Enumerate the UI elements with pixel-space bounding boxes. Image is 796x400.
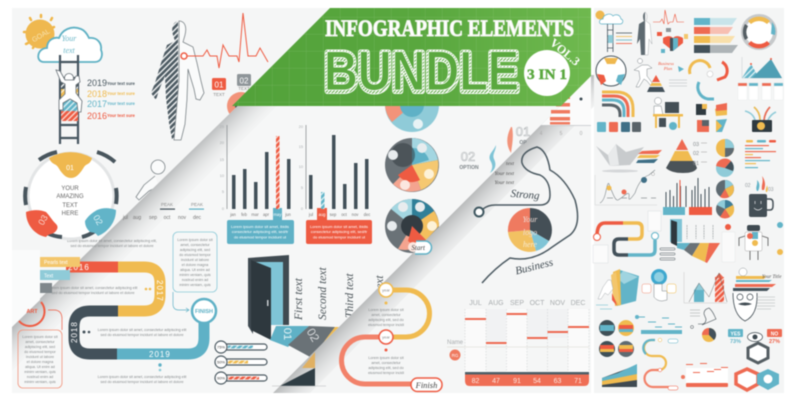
icon: ring node <box>474 208 484 216</box>
axis labels: 5 <box>301 186 303 190</box>
peak labels <box>161 192 203 204</box>
thumb: yes no: NO <box>771 332 778 338</box>
thumb: paper boat <box>596 144 662 172</box>
axis labels: 10 <box>220 174 224 178</box>
icon: heart marker <box>181 53 187 59</box>
axis labels: 0 <box>222 207 224 211</box>
timeline: band years <box>68 263 171 359</box>
ribbon 02: 02 <box>304 326 323 345</box>
callout: teal outlined box: do eiusmod tempor <box>179 253 212 257</box>
title: infographic elements: INFOGRAPHIC ELEMENTS <box>325 16 574 41</box>
thumb: tv <box>745 107 776 132</box>
icon: walking person <box>136 160 165 200</box>
axis labels <box>220 125 224 211</box>
callout: teal outlined box: amet, consectetur <box>180 243 210 247</box>
pie chart: logo: logo <box>523 228 537 237</box>
callout: teal outlined box: aliqua. Ut enim ad <box>180 268 210 272</box>
progress bar: red: 90% <box>217 376 225 380</box>
callout: red outlined box: et dolore magna <box>27 360 54 364</box>
icon: open door with ribbons <box>248 255 339 358</box>
center text: HERE <box>62 211 78 217</box>
thumb: horizontal bars <box>745 140 776 168</box>
icon: sun: GOAL <box>31 28 52 44</box>
icon: start circle <box>19 302 45 326</box>
thumbnails: row six <box>593 211 783 263</box>
thumb: door <box>670 219 720 263</box>
thumb: ring <box>743 16 775 48</box>
bar chart: jul to dec: sep <box>330 212 337 217</box>
icon: cloud: Your <box>62 34 77 43</box>
badge: 01: TEXT <box>213 92 225 97</box>
options: OP <box>519 140 527 146</box>
marker: yellow year <box>379 283 393 304</box>
thumb: pills <box>658 338 678 390</box>
thumb: four colour blocks <box>696 103 727 132</box>
axis labels: 10 <box>299 165 303 169</box>
text block: path paragraphs: amet, consectetur <box>371 313 401 317</box>
thumb: cone <box>666 139 697 173</box>
axis labels fragment: PEAK <box>161 202 173 207</box>
legend: years: 2019 <box>87 78 107 88</box>
thumb: numbered labels: 03 <box>693 142 699 148</box>
label: strong: Strong <box>510 188 541 202</box>
axis labels: 5 <box>222 190 224 194</box>
thumb: area chart <box>602 364 637 387</box>
text block: path paragraphs: eiusmod tempor incidi <box>368 371 404 375</box>
rotated labels: door list: First text <box>293 277 305 321</box>
axis labels: 15 <box>220 158 224 162</box>
axis labels fragment: nov <box>178 215 187 221</box>
value band: 63 <box>554 378 561 385</box>
label: business: Business <box>514 256 554 277</box>
thumbnails: row eight <box>599 308 782 357</box>
axis labels fragment: aug <box>133 215 141 221</box>
text block: path paragraphs: adipiscing elit, sed do <box>368 318 404 322</box>
pie chart: middle <box>385 138 439 192</box>
callout: red text box: Lorem ipsum dolor sit amet, ibidis <box>310 224 368 229</box>
callout: teal text box: do eiusmod tempor incidunt ut <box>234 234 287 240</box>
options: 01 <box>516 124 530 139</box>
left white fold strip <box>12 250 40 327</box>
badge: 3 in 1 <box>524 50 570 96</box>
arrow: red box to start <box>48 310 62 330</box>
legend: years: 2018 <box>87 89 107 99</box>
peak labels: 04 <box>191 192 203 204</box>
callout: teal outlined box <box>173 232 217 292</box>
callout: red outlined box: nostrud enim ad <box>27 375 53 379</box>
legend: years: Your text sure <box>107 81 136 86</box>
pie fragment under banner <box>227 92 305 120</box>
thumb: progress bars small <box>660 248 675 260</box>
callout: red outlined box: adipiscing elit, sed <box>25 345 55 349</box>
thumb: snake path small <box>643 340 669 387</box>
thumb: four pies <box>716 139 734 219</box>
thumb: snake timeline <box>597 223 655 255</box>
callout: red outlined box: do eiusmod tempor <box>24 350 57 354</box>
progress bar: yellow: 50% <box>217 360 225 364</box>
bar chart: jul to dec: nov <box>352 212 359 217</box>
thumb: icon squares <box>597 122 641 132</box>
timeline: band years: 2016 <box>68 263 90 272</box>
chart: monthly calendar <box>447 300 589 386</box>
pill: start <box>411 241 432 254</box>
pie chart: top <box>385 78 439 132</box>
thumb: bar charts <box>663 178 712 215</box>
axis labels: 25 <box>220 125 224 129</box>
bar chart: jul to dec: jul <box>308 212 313 217</box>
thumbnails: row two <box>596 56 783 100</box>
text block: timeline paragraphs: sed do eiusmod tempor incidunt ut labore et dolore <box>100 380 184 384</box>
thumb: peak chart <box>684 272 727 303</box>
banner: green title <box>232 8 591 106</box>
thumb: muscle <box>690 308 716 342</box>
red badge <box>450 350 460 360</box>
center text <box>56 186 84 217</box>
timeline: snake path <box>66 267 204 354</box>
segment: 03 red: 03 <box>36 213 50 227</box>
text block: timeline paragraphs: sed do eiusmod tempor incidunt ut labore et dolore <box>51 291 135 295</box>
thumb: rainbow arcs <box>602 92 633 117</box>
icon: cloud <box>38 28 102 62</box>
axis labels fragment <box>122 202 204 221</box>
callout: red outlined box: incidunt ut labore <box>26 355 54 359</box>
bar chart: jan to jun: apr <box>263 212 270 217</box>
callout: red outlined box: minim veniam, quis <box>24 370 56 374</box>
red badge: RG <box>452 353 459 358</box>
text block: timeline paragraphs <box>49 239 186 384</box>
callout: teal outlined box: nostrud enim ad <box>182 278 208 282</box>
top-right corner fragment: 4 <box>540 131 543 137</box>
text lines: Your text <box>494 180 514 186</box>
bar chart: jul to dec: aug <box>318 212 326 217</box>
callout: teal outlined box: et dolore magna <box>182 263 209 267</box>
thumb: numbered labels: 01 <box>693 161 699 167</box>
thumb: hexagons <box>736 343 779 390</box>
thumb: desk person <box>653 98 683 130</box>
top-right corner fragment: 0 <box>580 131 583 137</box>
top-right corner fragment <box>540 75 591 137</box>
bar chart: jul to dec <box>299 125 370 220</box>
month labels: SEP <box>510 300 524 307</box>
thumb: yes no: 73% <box>730 339 741 345</box>
thumb: ribbons <box>694 18 738 53</box>
month labels <box>469 300 585 307</box>
pill: finish <box>411 378 442 392</box>
thumb: walking person pyramid <box>634 58 687 92</box>
text block: timeline paragraphs: Lorem ipsum dolor sit amet, consectetur adipiscing elit <box>49 286 137 290</box>
peak labels: 03 <box>161 192 173 204</box>
thumb: arrows cycle <box>690 61 727 99</box>
axis labels: 15 <box>299 145 303 149</box>
bar chart: jan to jun: may <box>274 212 282 217</box>
callout: red text box: do eiusmod tempor incidunt ut <box>313 234 366 240</box>
callout: teal outlined box: adipiscing elit, sed <box>180 248 210 252</box>
segment: 01 yellow: 01 <box>66 165 74 172</box>
thumbnails: row four <box>596 139 776 219</box>
value band: 71 <box>574 378 582 385</box>
pill: start: Start <box>411 244 426 252</box>
text block: path paragraphs: adipiscing elit, sed do <box>368 366 404 370</box>
callout: red outlined box <box>18 330 62 388</box>
icon: finish circle: FINISH <box>195 309 213 315</box>
icon: climbing person <box>56 70 82 112</box>
month labels: JUL <box>469 300 482 307</box>
badge: 02: 02 <box>240 76 249 86</box>
panel: thumbnails background <box>594 8 784 393</box>
thumb: line chart <box>595 170 657 205</box>
text lines <box>494 161 514 186</box>
bar chart: jan to jun: feb <box>241 212 248 217</box>
month labels: DEC <box>571 300 585 307</box>
timeline: band years: 2017 <box>155 280 164 302</box>
thumb: walking person pyramid: Plan <box>663 66 673 71</box>
icon: stacked coloured steps <box>61 78 78 121</box>
axis labels fragment: PEAK <box>191 202 203 207</box>
fold: lower-right shadow panel <box>273 75 625 393</box>
callout: teal outlined box: minim veniam, quis <box>179 283 211 287</box>
thumb: yes no <box>728 329 782 345</box>
thumb: numbered labels <box>693 142 707 167</box>
timeline: dots <box>82 288 162 371</box>
thumbnails: row one <box>596 10 775 55</box>
timeline: side bands: Pearls text <box>44 260 68 266</box>
callout: teal outlined box: Lorem ipsum dolor sit <box>177 238 213 242</box>
text block: path paragraphs: eiusmod tempor incidi <box>368 323 404 327</box>
options: 02 <box>461 149 475 164</box>
legend: years: Your text sure <box>107 101 136 106</box>
timeline: band years: 2018 <box>70 321 79 343</box>
thumb: mountain chart <box>742 57 782 78</box>
marker: red year <box>379 330 393 352</box>
text block: path paragraphs: Lorem ipsum dolor sit <box>368 356 404 360</box>
bar chart: jan to jun: jun <box>284 212 291 217</box>
thumb: four cards <box>738 83 783 100</box>
arrow: box to finish <box>173 292 189 312</box>
timeline: side bands: Text <box>44 274 54 280</box>
text lines: Your text <box>494 171 514 177</box>
callout: teal text box <box>227 220 294 244</box>
text block: path paragraphs <box>368 308 404 375</box>
axis labels fragment: oct <box>164 215 171 221</box>
options <box>459 124 530 173</box>
thumb: mug: 03 <box>768 187 774 193</box>
thumb: start finish circles <box>594 232 658 240</box>
marker: yellow year: year <box>382 288 391 292</box>
bar chart: jul to dec: dec <box>364 212 370 217</box>
legend: years: 2016 <box>87 111 107 121</box>
thumb: robot <box>722 222 783 262</box>
badge: 01 <box>212 78 226 97</box>
text block: timeline paragraphs: Lorem ipsum dolor sit amet, consectetur adipiscing elit <box>98 328 186 332</box>
axis labels fragment: sep <box>149 215 157 221</box>
value band: 47 <box>492 378 500 385</box>
thumb: hipster head <box>733 268 782 321</box>
thumb: yes no: 27% <box>769 339 780 345</box>
segment: 02 teal: 02 <box>91 213 105 227</box>
month labels: NOV <box>550 300 565 307</box>
center text: AMAZING <box>56 194 84 200</box>
center text: TEXT <box>62 203 78 209</box>
legend: years: 2017 <box>87 99 107 109</box>
ribbon 03 <box>312 327 339 358</box>
chart: ECG line <box>184 13 268 68</box>
thumb: book cube <box>596 269 639 309</box>
thumb: body ecg <box>637 10 688 55</box>
timeline: side bands <box>40 257 80 293</box>
rotated labels: door list <box>293 267 386 321</box>
rotated labels: door list: text <box>374 275 386 292</box>
value band: 82 <box>472 378 479 385</box>
callout: red outlined box: Lorem ipsum dolor sit <box>22 335 58 339</box>
icon: arm outline <box>482 147 578 283</box>
panel: year path <box>342 241 442 392</box>
value band <box>465 372 589 386</box>
text block: timeline paragraphs: sed do eiusmod tempor incidunt ut labore et dolore <box>100 333 184 337</box>
icon: cloud: text <box>63 46 76 55</box>
callout: red text box <box>306 220 372 244</box>
axis labels: 0 <box>301 207 303 211</box>
panel: middle fold background <box>12 8 591 393</box>
ribbon 01: 01 <box>281 328 293 340</box>
thumbnails: row five <box>595 170 774 217</box>
badge: 02: TEXT <box>238 86 250 91</box>
rotated labels: door list: Second text <box>317 267 329 320</box>
bar chart: jul to dec: oct <box>341 212 348 217</box>
bar chart: jan to jun: mar <box>251 212 259 217</box>
axis labels fragment: jul <box>122 215 128 221</box>
panel: human body heartbeat <box>136 13 305 204</box>
center text: YOUR <box>61 186 79 192</box>
chart: area fragment <box>272 352 326 386</box>
name label: Name <box>447 340 464 346</box>
axis labels: 20 <box>299 125 303 129</box>
thumbnails: row three <box>597 92 776 132</box>
thumb: goal ladder <box>596 10 632 52</box>
text block: timeline paragraphs: sed do eiusmod tempor incidunt ut labore et dolore <box>70 244 154 248</box>
thumb: calendar <box>681 363 728 387</box>
callout: red outlined box: minim veniam, quis <box>24 380 56 384</box>
callout: red outlined box: aliqua. Ut enim ad <box>25 365 55 369</box>
panel: three-part circle <box>25 152 117 239</box>
panel: goal ladder <box>24 15 136 144</box>
title: bundle: BUNDLE <box>324 39 519 102</box>
path: yellow arc <box>386 290 430 337</box>
pie chart: bottom <box>385 199 439 253</box>
badge: 3 in 1: 3 IN 1 <box>527 67 567 83</box>
pie chart: logo <box>508 208 552 252</box>
thumb: touch icon <box>642 269 676 301</box>
text block: timeline paragraphs: Lorem ipsum dolor sit amet, consectetur adipiscing elit, <box>67 239 157 243</box>
icon: start circle: ART <box>26 309 38 315</box>
progress bar: teal: 75% <box>217 344 225 350</box>
text block: timeline paragraphs: Lorem ipsum dolor sit amet, consectetur adipiscing elit <box>98 375 186 379</box>
icon: finish circle <box>192 299 216 323</box>
marker: red year: year <box>382 334 391 340</box>
pill: finish: Finish <box>415 380 437 390</box>
callout: teal text box: Lorem ipsum dolor sit amet, ibidis <box>231 224 289 229</box>
legend: years: Your text sure <box>107 91 136 96</box>
thumb: yes no: YES <box>730 332 741 338</box>
path: red arc <box>342 337 415 384</box>
main panel background <box>12 8 591 393</box>
bar chart: jan to jun <box>220 125 291 220</box>
month labels: AUG <box>488 300 504 307</box>
text block: path paragraphs: Lorem ipsum dolor sit <box>368 308 404 312</box>
thumb: numbered labels: 02 <box>693 151 699 157</box>
icon: ladder <box>60 55 78 144</box>
top-right corner fragment: 5 <box>560 131 563 137</box>
arcs <box>25 152 117 237</box>
thumb: mug <box>745 176 774 217</box>
panel: strong business muscle <box>459 124 578 283</box>
callout: teal outlined box: minim veniam, quis <box>179 273 211 277</box>
options: OPTION <box>459 165 479 171</box>
callout: red text box: consectetur adipiscing elit, sed/tr <box>311 229 368 234</box>
month markers <box>465 313 589 344</box>
bar chart: jan to jun: jan <box>229 212 236 217</box>
badge: 01: 01 <box>215 80 224 90</box>
text block: path paragraphs: amet, consectetur <box>371 361 401 365</box>
badge: vol 3: VOL.3 <box>547 35 583 69</box>
badge: 02 <box>237 74 251 91</box>
pie chart: logo: here <box>523 240 537 249</box>
title: bundle: BUNDLE <box>324 40 519 103</box>
pie chart: logo: Your <box>523 215 538 224</box>
thumb: gantt <box>635 315 682 334</box>
legend: years <box>87 78 136 121</box>
callout: teal outlined box: incidunt ut labore <box>181 258 209 262</box>
month labels: OCT <box>530 300 545 307</box>
icon: body silhouette <box>151 21 204 140</box>
thumbnails: row nine <box>602 338 779 390</box>
value band: 91 <box>513 378 521 385</box>
axis labels fragment: dec <box>193 215 202 221</box>
thumb: walking person pyramid: Business <box>658 61 674 66</box>
axis labels: 20 <box>220 141 224 145</box>
thumb: mug: 02 <box>745 183 751 189</box>
axis labels <box>299 125 303 211</box>
thumb: text boxes <box>593 211 661 263</box>
title: bundle: BUNDLE <box>324 40 519 103</box>
value band: 54 <box>533 378 541 385</box>
callout: red outlined box: amet, consectetur <box>25 340 55 344</box>
text lines: text <box>506 161 514 167</box>
progress bars <box>215 341 267 384</box>
thumb: three-part circle <box>596 56 626 86</box>
thumbnails: row seven <box>596 268 782 321</box>
legend: years: Your text sure <box>107 113 136 118</box>
rotated labels: door list: Third text <box>344 273 356 318</box>
thumb: hipster head: Your Title <box>762 275 782 280</box>
timeline: band years: 2019 <box>149 350 171 359</box>
callout: teal text box: consectetur adipiscing elit, sed/tr <box>232 229 289 234</box>
thumb: round badges <box>599 320 634 357</box>
